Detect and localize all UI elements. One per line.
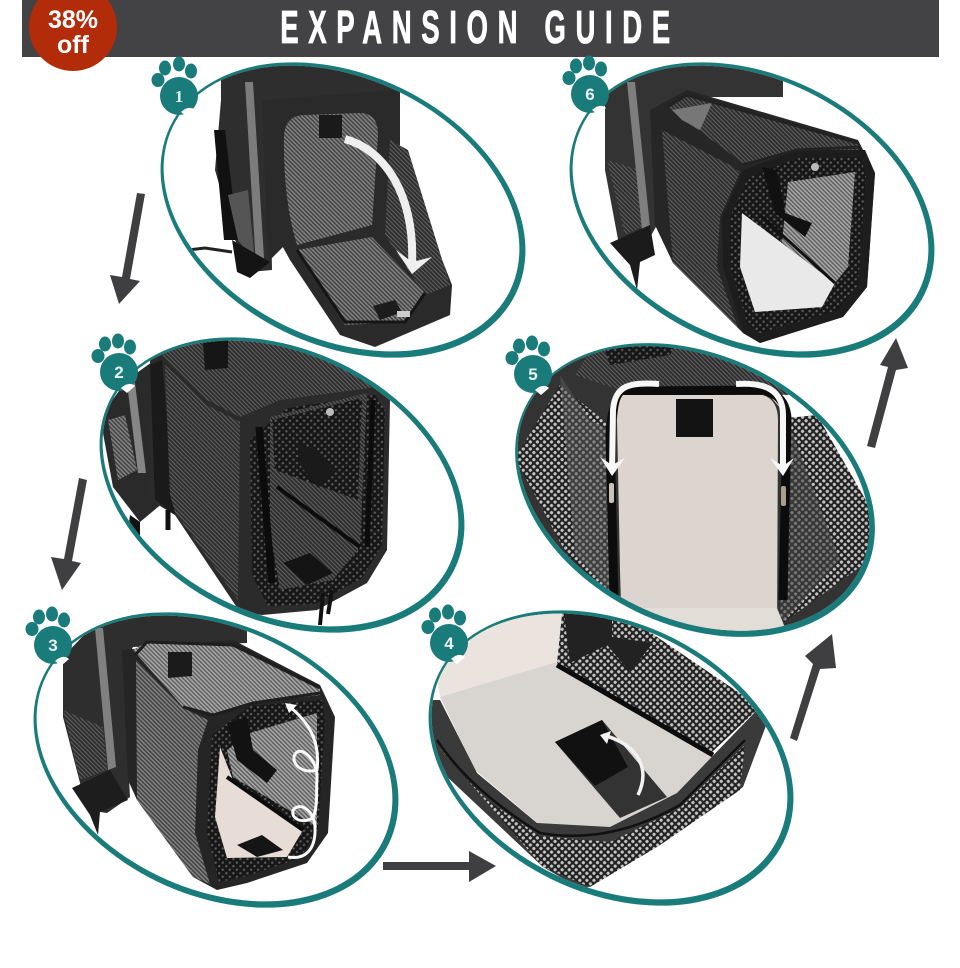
arrow: step 5 to 6	[867, 338, 908, 448]
icon: paw 4	[422, 604, 468, 664]
icon: paw 4: 4	[444, 634, 454, 653]
discount badge	[29, 0, 117, 71]
discount badge: 38%	[48, 6, 98, 34]
icon: paw 5: 5	[528, 365, 538, 384]
arrow: step 4 to 5	[790, 634, 836, 741]
discount badge: off	[57, 31, 90, 59]
panel: step 1	[160, 62, 526, 358]
icon: paw 2: 2	[114, 363, 124, 382]
icon: paw 1: 1	[175, 87, 183, 106]
icon: paw 6: 6	[585, 85, 595, 104]
header banner	[22, 0, 939, 57]
icon: paw 3	[26, 606, 72, 666]
panel: step 6	[570, 62, 934, 358]
panel: step 3	[34, 612, 398, 908]
arrow: step 1 to 2	[110, 193, 145, 304]
icon: paw 3: 3	[48, 636, 58, 655]
panel: step 4	[428, 610, 794, 906]
panel: step 5	[515, 343, 875, 637]
panel: step 2	[100, 337, 464, 633]
title: EXPANSION GUIDE	[280, 3, 670, 54]
icon: paw 5	[506, 336, 552, 395]
icon: paw 1	[152, 56, 198, 117]
icon: paw 2	[92, 334, 138, 393]
arrow: step 2 to 3	[51, 478, 87, 590]
icon: paw 6	[562, 56, 609, 115]
arrow: step 3 to 4	[383, 851, 496, 882]
